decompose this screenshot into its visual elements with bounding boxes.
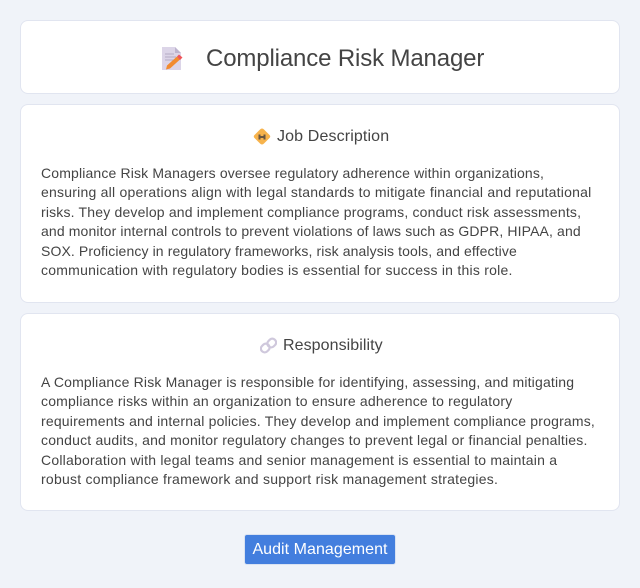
heading: responsibility: Responsibility (283, 337, 383, 354)
panel: title card (20, 20, 620, 94)
heading: job description: Job Description (277, 128, 389, 145)
title: Compliance Risk Manager (206, 45, 484, 72)
text block: job description: ensuring all operations align with legal standards to mitigate financial and reputational (41, 184, 591, 200)
icon: chain link (260, 338, 277, 354)
text block: responsibility: A Compliance Risk Manager is responsible for identifying, assessing, and mitigating (41, 374, 574, 390)
text block: responsibility: Collaboration with legal teams and senior management is essential to maintain a (41, 452, 557, 468)
panel: job description (20, 104, 620, 303)
text block: responsibility: requirements and internal policies. They develop and implement compliance programs, (41, 413, 595, 429)
button: audit management: Audit Management (252, 541, 388, 558)
text block: job description: risks. They develop and implement compliance programs, conduct risk assessments, (41, 204, 581, 220)
text block: job description: Compliance Risk Managers oversee regulatory adherence within organizations, (41, 165, 544, 181)
text block: responsibility: robust compliance framework and support risk management strategies. (41, 471, 498, 487)
text block: responsibility: compliance risks within an organization to ensure adherence to regulatory (41, 393, 512, 409)
text block: responsibility (41, 374, 595, 487)
text block: job description: and monitor internal controls to prevent violations of laws such as GDPR, HIPAA, and (41, 223, 581, 239)
text block: job description (41, 165, 591, 278)
text block: responsibility: conduct audits, and monitor regulatory changes to prevent legal or financial penalties. (41, 432, 588, 448)
button: audit management (244, 534, 396, 565)
text block: job description: SOX. Proficiency in regulatory frameworks, risk analysis tools, and effective (41, 243, 517, 259)
text block: job description: communication with regulatory bodies is essential for success in this role. (41, 262, 513, 278)
panel: responsibility (20, 313, 620, 511)
icon: document with pencil (162, 47, 182, 70)
icon: road sign diamond (254, 128, 270, 144)
